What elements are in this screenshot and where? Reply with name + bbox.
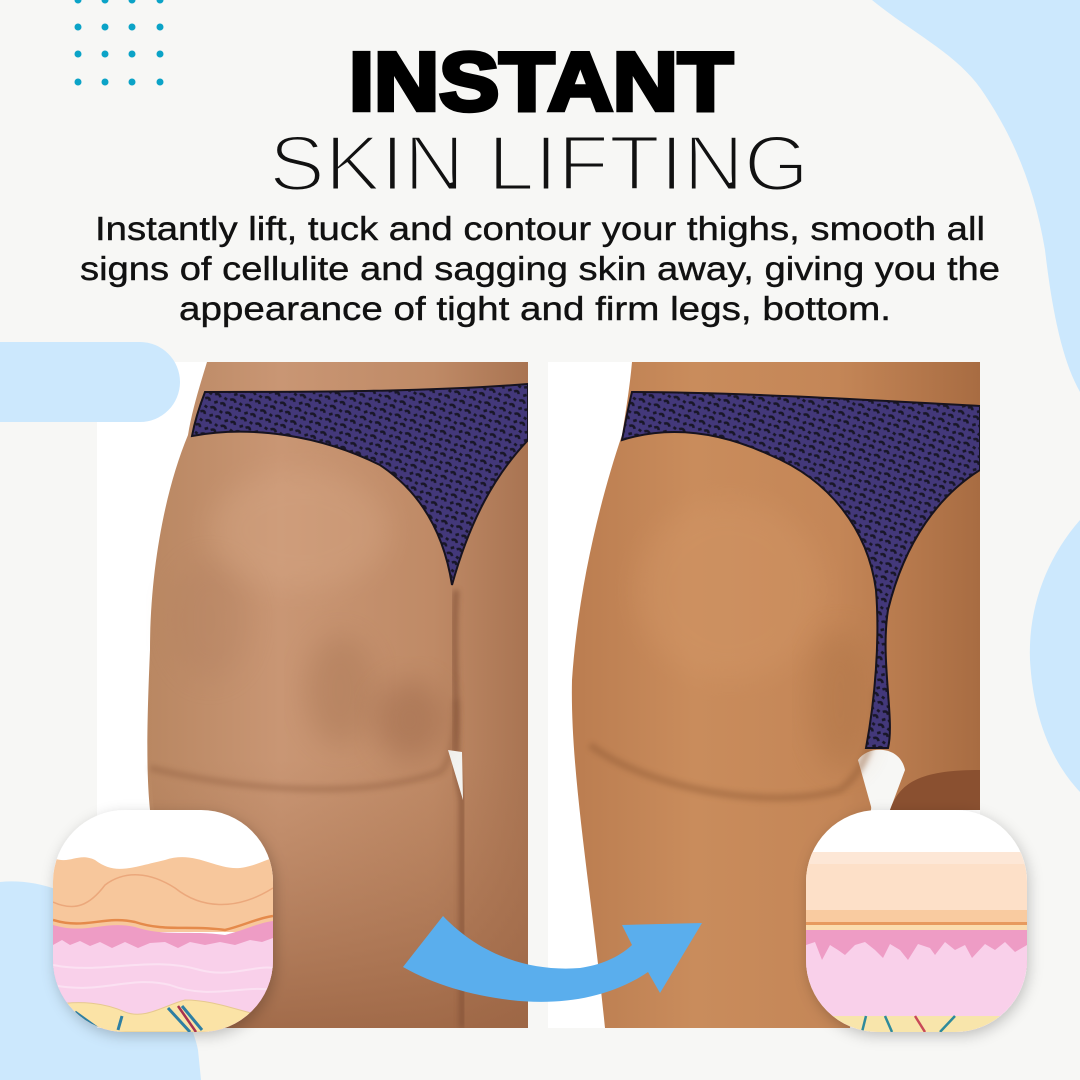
description text: Instantly lift, tuck and contour your thighs, smooth all xyxy=(95,210,985,247)
light dermis layer xyxy=(806,942,1027,1032)
upper fat layer xyxy=(53,857,273,932)
smooth fat layers xyxy=(806,852,1027,864)
light dermis layer xyxy=(53,938,273,1032)
title: INSTANT xyxy=(349,35,733,128)
before skin diagram inset xyxy=(53,810,273,1032)
after skin diagram inset xyxy=(806,810,1027,1032)
fat cells layer xyxy=(67,1000,250,1032)
fat cells layer xyxy=(833,1016,1000,1032)
description text xyxy=(80,210,1000,327)
description text: signs of cellulite and sagging skin away, giving you the xyxy=(80,250,1000,287)
arrow xyxy=(403,916,702,1002)
orange membrane line xyxy=(53,916,273,930)
description text: appearance of tight and firm legs, bottom. xyxy=(179,290,891,327)
decorative blob: top right xyxy=(872,0,1080,392)
after photo panel xyxy=(548,362,980,1028)
decorative blob: bottom left xyxy=(0,881,201,1080)
dot grid decoration xyxy=(74,0,164,86)
pink dermis xyxy=(53,921,273,1032)
decorative blob: right xyxy=(1030,520,1080,792)
title xyxy=(269,35,809,207)
before photo panel xyxy=(97,362,528,1028)
pink dermis xyxy=(806,930,1027,970)
title: SKIN LIFTING xyxy=(269,119,809,207)
decorative pill: left xyxy=(0,342,180,422)
